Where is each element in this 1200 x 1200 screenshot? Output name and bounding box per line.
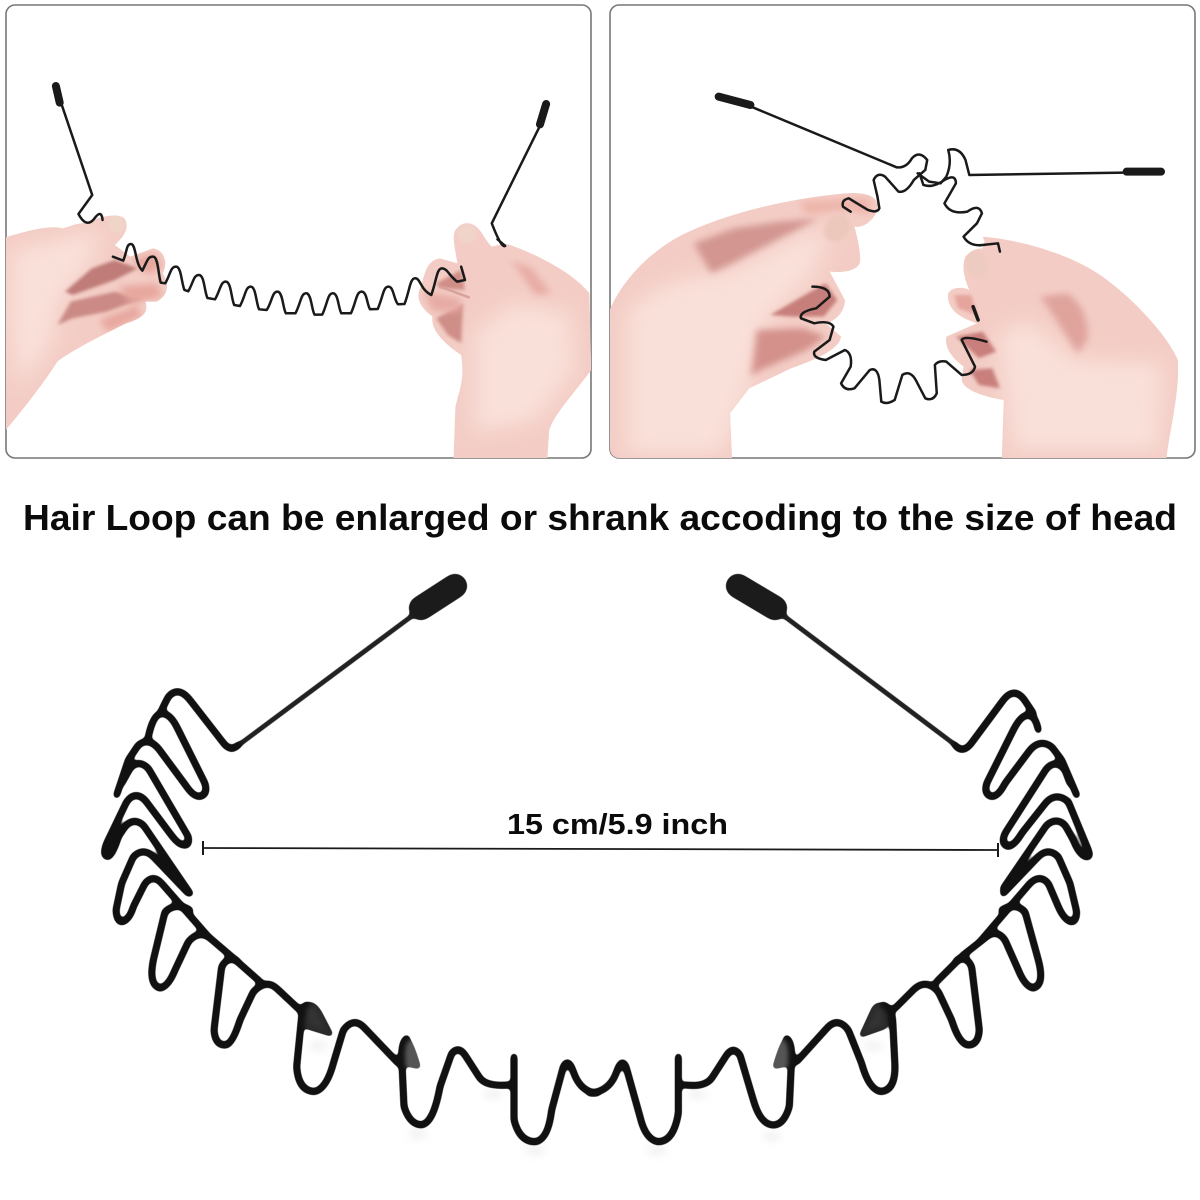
panel: band shrunk into a small loop between two hands — [600, 5, 1195, 463]
left half zigzag teeth — [105, 692, 597, 1142]
heading: Hair Loop can be enlarged or shrank accoding to the size of head — [23, 497, 1177, 538]
headband shadows — [309, 1044, 882, 1152]
band wire with zigzag teeth — [56, 86, 546, 315]
headband product illustration — [105, 586, 1089, 1142]
dimension label: 15 cm/5.9 inch — [507, 809, 728, 841]
dimension line — [203, 841, 998, 857]
right half zigzag teeth — [590, 693, 1089, 1142]
right end wire and cap — [738, 586, 962, 750]
panel: band stretched open between two hands — [0, 5, 597, 463]
left hand holding band — [6, 216, 167, 430]
loop wire with end caps — [719, 97, 1161, 403]
left end wire and cap — [232, 586, 455, 750]
right hand holding band — [413, 220, 597, 463]
left hand gripping loop — [610, 193, 878, 458]
right hand gripping loop — [946, 236, 1178, 458]
